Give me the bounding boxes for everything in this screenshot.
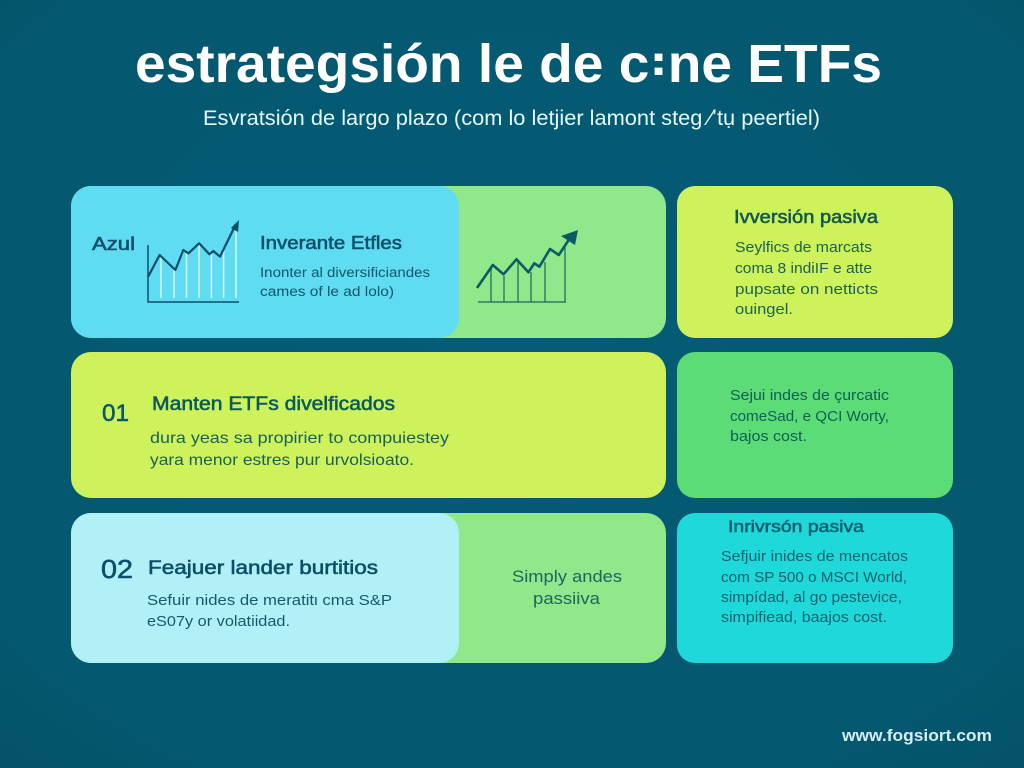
- text block: yellow card description: [735, 240, 878, 318]
- text block: yellow card description: Seylfics de marcats: [735, 240, 872, 256]
- footer url: www.fogsiort.com: [841, 726, 992, 745]
- heading: Ivversión pasiva: Ivversión pasiva: [734, 207, 879, 227]
- text block: step 02 description: [147, 592, 392, 630]
- label: Azul: Azul: [92, 234, 135, 254]
- text block: step 01 description: [150, 430, 449, 469]
- text block: top left description: cames of le ad lolo): [260, 284, 394, 299]
- text block: teal card description: [721, 549, 908, 626]
- text block: step 01 description: yara menor estres pur urvolsioato.: [150, 452, 414, 469]
- number: 02: 02: [101, 554, 133, 584]
- text block: Simply andes passiiva: passiiva: [533, 589, 601, 608]
- text block: Simply andes passiiva: Simply andes: [512, 567, 622, 586]
- panel: step 02 pale blue and green card: [71, 513, 666, 663]
- heading: Manten ETFs divelficados: Manten ETFs divelficados: [152, 394, 395, 415]
- heading: Inverante Etfles: Inverante Etfles: [260, 233, 402, 253]
- heading: Inrivrsón pasiva: Inrivrsón pasiva: [728, 517, 865, 536]
- heading: Feajuer lander burtitios: Feajuer lander burtitios: [148, 558, 378, 579]
- text block: teal card description: simpifiead, baajos cost.: [721, 610, 887, 626]
- panel: top right yellow card: [677, 186, 953, 338]
- panel: top left blue and green card: [71, 186, 666, 338]
- text block: green card description: Sejui indes de çurcatic: [730, 388, 889, 404]
- text block: yellow card description: pupsate on netticts: [735, 282, 878, 298]
- panel: step 01 yellow card: [71, 352, 666, 498]
- text block: step 02 description: Sefuir nides de meratitι cma S&P: [147, 592, 392, 609]
- chart: rising line on green: [477, 230, 578, 302]
- panel: bottom right teal card: [677, 513, 953, 663]
- text block: step 01 description: dura yeas sa propirier to compuiestey: [150, 430, 449, 447]
- text block: Simply andes passiiva: [512, 567, 622, 608]
- number: 01: 01: [102, 400, 129, 427]
- panel: middle right green card: [677, 352, 953, 498]
- subtitle: Esvratsión de largo plazo (com lo letjier lamont steg ⁄ʼtụ peertiel): [203, 107, 820, 130]
- text block: green card description: comeSad, e QCI Worty,: [730, 409, 889, 425]
- text block: step 02 description: eS07y or volatiidad.: [147, 613, 290, 630]
- title: estrategsión le de c꞉ne ETFs: [135, 34, 882, 94]
- chart: rising line on blue: [148, 220, 239, 302]
- text block: green card description: [730, 388, 889, 445]
- text block: top left description: [260, 265, 430, 299]
- text block: teal card description: com SP 500 o MSCI World,: [721, 570, 907, 586]
- text block: yellow card description: ouingel.: [735, 302, 793, 318]
- text block: teal card description: Sefjuir inides de mencatos: [721, 549, 908, 565]
- text block: green card description: bajos cost.: [730, 429, 807, 445]
- text block: top left description: Inonter al diversificiandes: [260, 265, 430, 280]
- text block: teal card description: simpídad, al go pestevice,: [721, 590, 902, 606]
- text block: yellow card description: coma 8 indiIF e atte: [735, 261, 872, 277]
